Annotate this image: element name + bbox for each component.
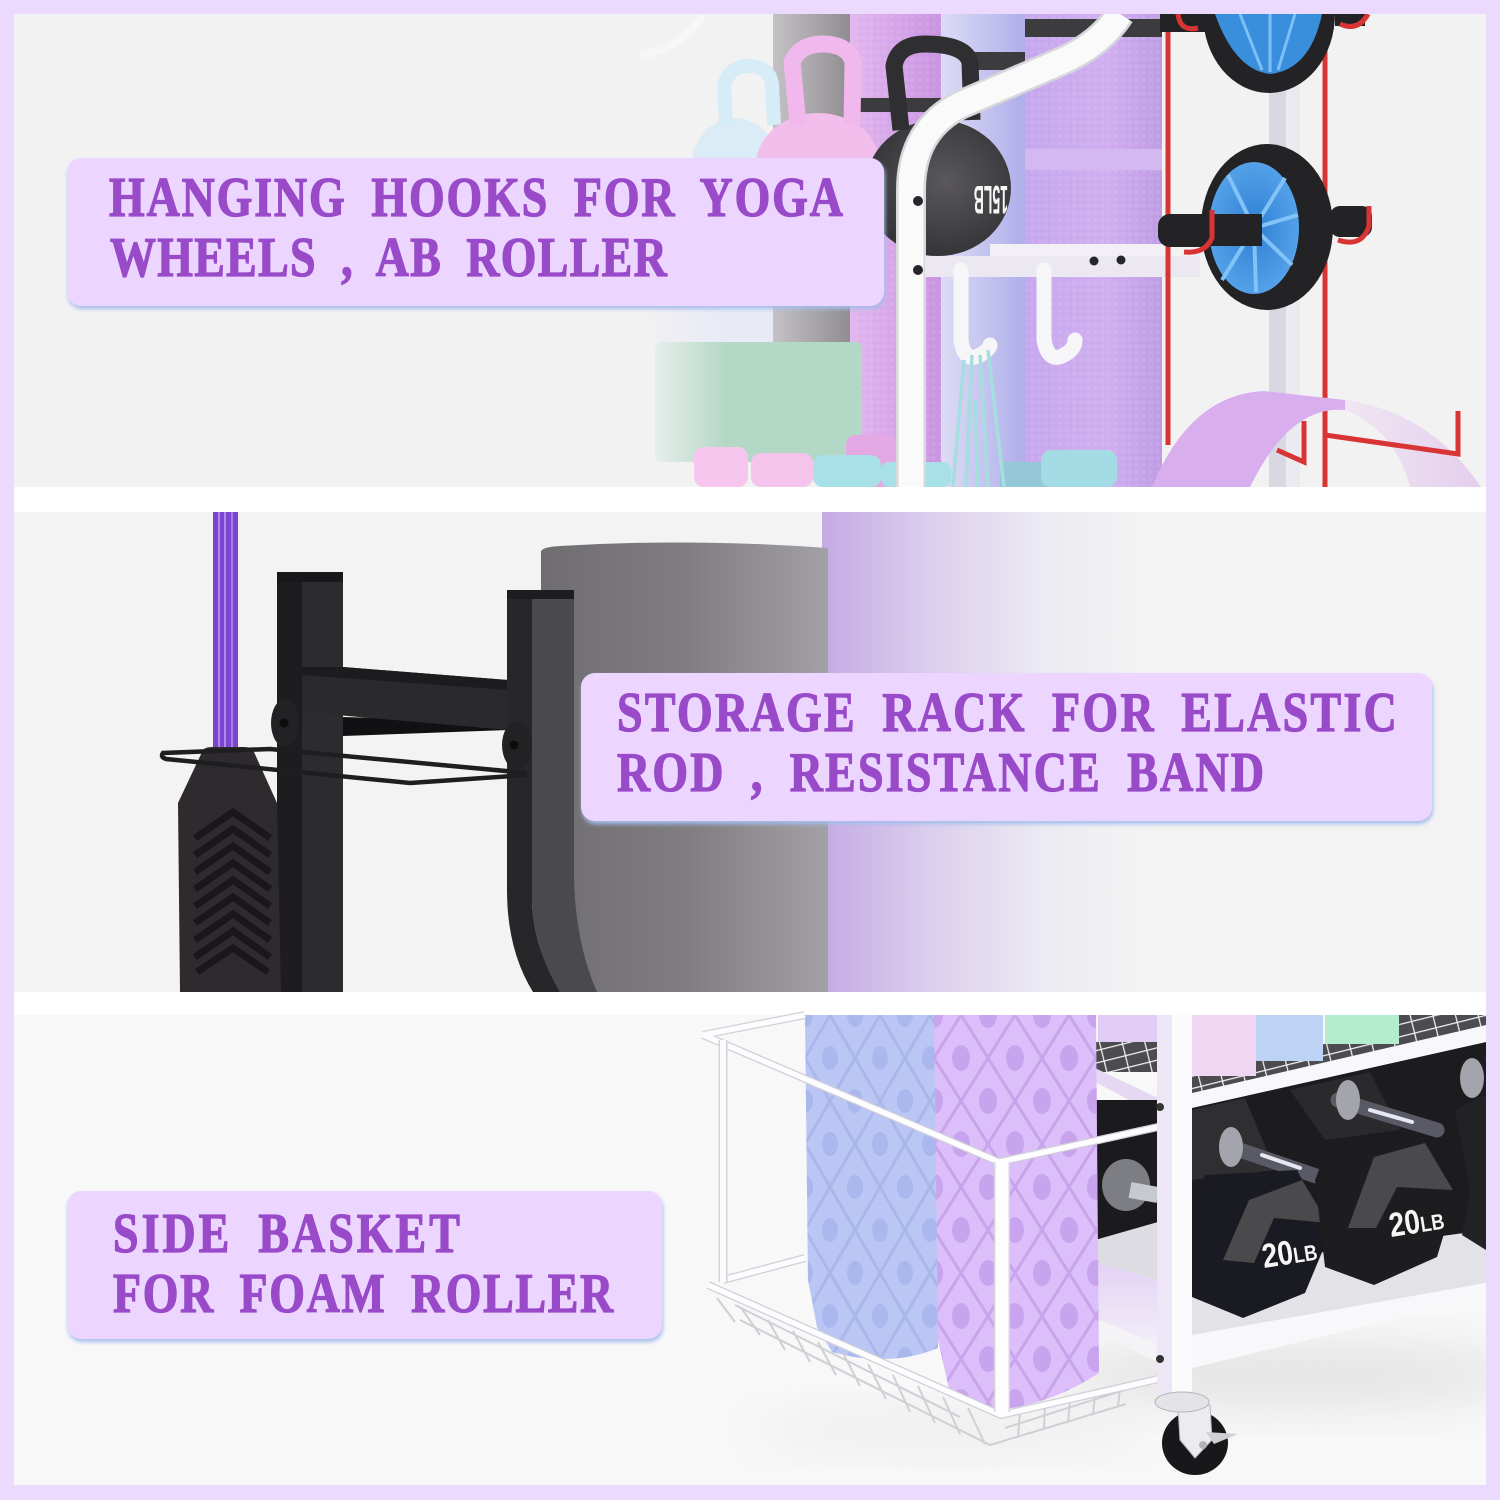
lower perforated shelf: [1192, 1230, 1486, 1368]
dumbbell 20LB front: 20LB: [1259, 1229, 1320, 1276]
grip chevrons: [195, 812, 270, 972]
wire basket: [703, 1015, 1167, 1445]
label: side basket: [67, 1191, 662, 1339]
panel: side basket: [14, 1015, 1500, 1500]
crossbar: [302, 667, 508, 736]
dumbbell 20LB front: [1192, 1170, 1330, 1318]
red lower hooks: [1277, 411, 1458, 462]
dumbbell 20LB rear: [1315, 1137, 1455, 1285]
elastic rod: [213, 512, 238, 748]
heading: STORAGE RACK FOR ELASTIC: [617, 682, 1397, 744]
foam roller blue: [805, 1015, 938, 1359]
heading: SIDE BASKET: [113, 1203, 460, 1265]
blocks on upper shelf: [1192, 1015, 1399, 1076]
right dumbbell edge: [1455, 1095, 1486, 1250]
bracket plates: [271, 699, 532, 769]
foam roller purple: [934, 1015, 1099, 1410]
heading: FOR FOAM ROLLER: [113, 1263, 614, 1325]
caster wheel: [1155, 1392, 1238, 1475]
label: hanging hooks: [67, 158, 884, 306]
yoga mat fade: [822, 512, 1142, 992]
kettlebell: pink: [756, 44, 880, 217]
heading: [109, 167, 843, 289]
wire holder: [162, 749, 527, 783]
jump rope: [953, 350, 1004, 487]
white rack frame: [911, 14, 1200, 487]
ab wheel top: [1160, 0, 1368, 93]
red rails: [1168, 14, 1325, 487]
grip handle: [178, 747, 281, 992]
heading: ROD , RESISTANCE BAND: [617, 742, 1264, 804]
yoga mats: [650, 14, 1162, 487]
bolts: [913, 196, 1126, 275]
rear post: [277, 572, 343, 992]
kettlebell: black 15LB: 15LB: [974, 177, 1008, 221]
dark dumbbell area: [1192, 1042, 1486, 1290]
heading: [113, 1203, 614, 1325]
ab wheel bottom: [1158, 144, 1372, 310]
upper wire shelf: [1192, 1015, 1486, 1094]
kettlebell: blue: [691, 66, 779, 218]
heading: WHEELS , AB ROLLER: [110, 227, 668, 289]
front post: [507, 590, 597, 992]
rack post: [1156, 1015, 1192, 1397]
panel: hanging hooks: [14, 0, 1486, 487]
gray roller: [541, 542, 828, 992]
dumbbells: [694, 435, 1117, 487]
panel: storage rack: [14, 512, 1486, 992]
yoga wheel: [1152, 391, 1481, 487]
kettlebell: black 15LB: [865, 44, 1011, 256]
upper shelf beam: [1192, 1025, 1486, 1108]
rear white post: [1269, 80, 1300, 487]
hooks on bar: [961, 270, 1075, 357]
white gaps between panels: [14, 487, 1486, 1015]
heading: HANGING HOOKS FOR YOGA: [109, 167, 843, 229]
label: storage rack: [581, 673, 1432, 821]
chrome bars: [1231, 1100, 1437, 1178]
dumbbell 20LB rear: 20LB: [1386, 1198, 1447, 1245]
left fade: [640, 300, 725, 487]
yoga block: [655, 342, 862, 462]
back shelf left of post: [1095, 1015, 1158, 1362]
heading: [617, 682, 1397, 804]
